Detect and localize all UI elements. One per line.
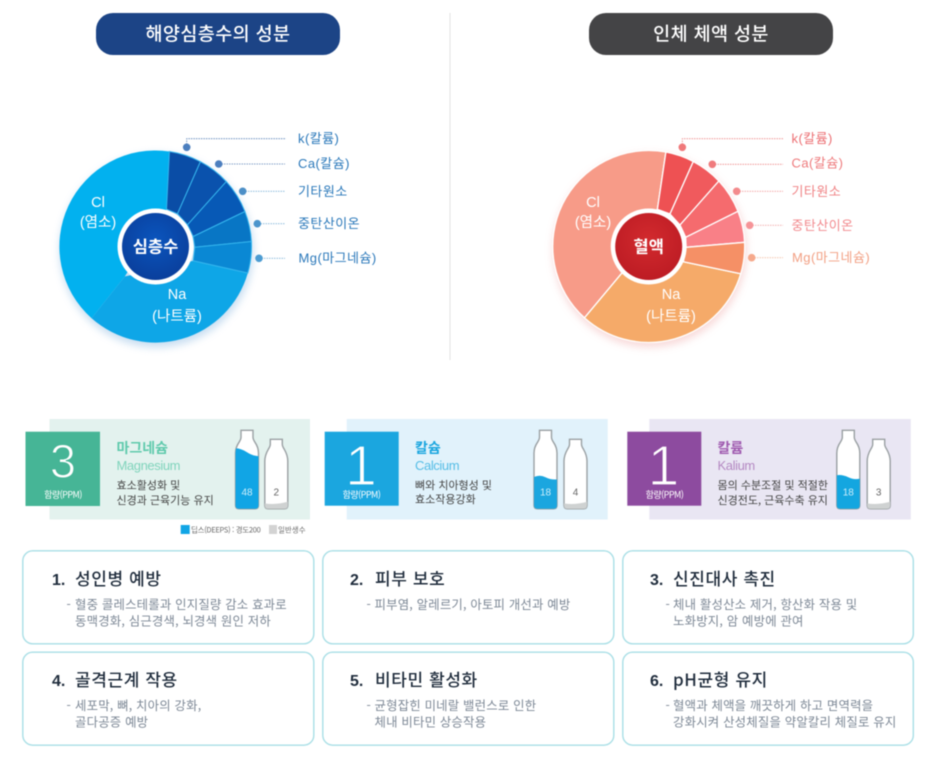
card 2: skin protection: 피부 보호 <box>375 565 445 590</box>
legend: 일반생수 <box>278 524 306 536</box>
card 3: metabolism promotion: 노화방지, 암 예방에 관여 <box>673 612 804 630</box>
card 4: musculoskeletal effect <box>23 652 314 745</box>
panel: magnesium: 신경과 근육기능 유지 <box>116 492 214 508</box>
card 4: musculoskeletal effect: 골다공증 예방 <box>75 712 148 730</box>
bottle: deep sea water 48: 48 <box>241 487 253 498</box>
card 1: adult disease prevention: 성인병 예방 <box>75 565 162 590</box>
heading: deep sea water composition: 해양심층수의 성분 <box>146 20 290 46</box>
callouts: blood minerals: 중탄산이온 <box>792 218 854 233</box>
pie labels: Cl and Na (blood): Na <box>662 287 681 303</box>
panel: calcium: 칼슘 <box>415 438 441 458</box>
pie labels: Cl and Na (deep sea water) <box>80 195 202 325</box>
pie labels: Cl and Na (deep sea water): (염소) <box>80 214 116 231</box>
card 1: adult disease prevention: 혈중 콜레스테롤과 인지질량 감소 효과로 <box>75 595 287 613</box>
panel: kalium: 신경전도, 근육수축 유지 <box>718 492 828 508</box>
card 2: skin protection <box>323 551 614 644</box>
callouts: deep sea water minerals: Ca(칼슘) <box>298 156 350 171</box>
callouts: deep sea water minerals: k(칼륨) <box>298 131 339 146</box>
panel: kalium: Kalium <box>718 458 755 473</box>
pie labels: Cl and Na (deep sea water): Na <box>168 287 187 303</box>
panel: calcium <box>325 419 608 520</box>
callouts: blood minerals: Mg(마그네슘) <box>792 250 870 265</box>
center label: 혈액 <box>634 234 664 258</box>
callouts: blood minerals: Ca(칼슘) <box>792 156 843 170</box>
content badge: 1 ppm: 함량(PPM) <box>646 488 684 501</box>
card 4: musculoskeletal effect: 세포막, 뼈, 치아의 강화, <box>75 696 201 714</box>
bottle: regular water 2: 2 <box>274 487 280 498</box>
callouts: deep sea water minerals: Mg(마그네슘) <box>298 250 377 266</box>
content badge: 3 ppm: 3 <box>50 434 76 488</box>
card 2: skin protection: - <box>366 595 371 613</box>
card 3: metabolism promotion: 체내 활성산소 제거, 항산화 작용 및 <box>673 595 857 613</box>
card 4: musculoskeletal effect: 골격근계 작용 <box>75 666 178 691</box>
card 6: pH balance: 6. <box>650 673 663 690</box>
bottle: deep sea water 18 <box>836 430 861 509</box>
panel: magnesium: 마그네슘 <box>116 438 168 458</box>
panel: magnesium <box>26 419 310 520</box>
card 4: musculoskeletal effect: 4. <box>52 673 65 690</box>
bottle: regular water 2 <box>264 439 289 510</box>
content badge: 1 ppm <box>325 432 399 506</box>
bottle: deep sea water 18: 18 <box>540 487 551 498</box>
callouts: deep sea water minerals: 기타원소 <box>298 184 348 199</box>
card 4: musculoskeletal effect: - <box>66 696 71 714</box>
heading: deep sea water composition <box>96 13 340 55</box>
card 5: vitamin activation: 체내 비타민 상승작용 <box>374 712 486 730</box>
callouts: blood minerals: k(칼륨) <box>792 131 833 146</box>
card 5: vitamin activation: 비타민 활성화 <box>375 666 478 691</box>
content badge: 1 ppm <box>627 432 701 506</box>
panel: calcium: Calcium <box>415 458 459 473</box>
content badge: 1 ppm: 1 <box>648 434 679 498</box>
panel: magnesium: 효소활성화 및 <box>116 477 180 493</box>
card 1: adult disease prevention: 1. <box>52 572 65 589</box>
heading: body fluid composition: 인체 체액 성분 <box>653 20 769 46</box>
card 3: metabolism promotion <box>623 551 913 644</box>
callouts: deep sea water minerals: 중탄산이온 <box>298 216 360 231</box>
pie chart: blood <box>553 150 747 348</box>
card 1: adult disease prevention <box>23 551 314 644</box>
callouts: blood minerals <box>678 131 870 265</box>
card 5: vitamin activation: 균형잡힌 미네랄 밸런스로 인한 <box>374 696 536 714</box>
content badge: 1 ppm: 함량(PPM) <box>343 488 381 501</box>
legend <box>181 524 306 536</box>
bottle: regular water 4: 4 <box>573 487 579 498</box>
content badge: 1 ppm: 1 <box>345 434 377 498</box>
card 5: vitamin activation <box>323 652 614 745</box>
pie labels: Cl and Na (blood): (나트륨) <box>646 308 696 325</box>
content badge: 3 ppm: 함량(PPM) <box>44 488 82 501</box>
panel: calcium: 효소작용강화 <box>415 491 476 507</box>
bottle: deep sea water 18: 18 <box>843 487 854 498</box>
callouts: blood minerals: 기타원소 <box>792 184 841 199</box>
panel: kalium: 몸의 수분조절 및 적절한 <box>718 477 828 493</box>
card 6: pH balance <box>623 652 913 745</box>
pie labels: Cl and Na (blood): (염소) <box>575 214 611 231</box>
card 6: pH balance: 혈액과 체액을 깨끗하게 하고 면역력을 <box>673 696 873 714</box>
card 1: adult disease prevention: 동맥경화, 심근경색, 뇌경색 원인 저하 <box>75 612 271 630</box>
pie labels: Cl and Na (blood): Cl <box>586 195 600 211</box>
pie chart: deep sea water <box>59 150 253 348</box>
heading: body fluid composition <box>589 13 833 55</box>
panel: kalium: 칼륨 <box>718 438 743 458</box>
card 5: vitamin activation: 5. <box>350 673 363 690</box>
pie labels: Cl and Na (deep sea water): (나트륨) <box>152 308 202 325</box>
card 6: pH balance: - <box>666 696 670 714</box>
bottle: regular water 3: 3 <box>876 487 882 498</box>
pie labels: Cl and Na (blood) <box>575 195 696 325</box>
bottle: deep sea water 48 <box>235 430 260 509</box>
panel: magnesium: Magnesium <box>116 458 180 473</box>
card 3: metabolism promotion: - <box>666 595 670 613</box>
card 2: skin protection: 2. <box>350 572 363 589</box>
card 3: metabolism promotion: 신진대사 촉진 <box>673 565 776 590</box>
card 1: adult disease prevention: - <box>66 595 71 613</box>
card 6: pH balance: 강화시켜 산성체질을 약알칼리 체질로 유지 <box>673 712 896 730</box>
content badge: 3 ppm <box>26 432 100 506</box>
bottle: regular water 3 <box>867 439 892 510</box>
card 6: pH balance: pH균형 유지 <box>673 666 768 691</box>
center label: 심층수 <box>133 234 178 258</box>
panel: calcium: 뼈와 치아형성 및 <box>415 477 492 493</box>
bottle: deep sea water 18 <box>534 430 558 509</box>
card 5: vitamin activation: - <box>366 696 371 714</box>
panel: kalium <box>627 419 911 520</box>
legend: 딥스(DEEPS) : 경도200 <box>191 524 261 536</box>
callouts: deep sea water minerals <box>183 131 377 266</box>
bottle: regular water 4 <box>564 439 588 510</box>
card 3: metabolism promotion: 3. <box>650 572 663 589</box>
card 2: skin protection: 피부염, 알레르기, 아토피 개선과 예방 <box>374 595 570 613</box>
pie labels: Cl and Na (deep sea water): Cl <box>91 195 105 211</box>
